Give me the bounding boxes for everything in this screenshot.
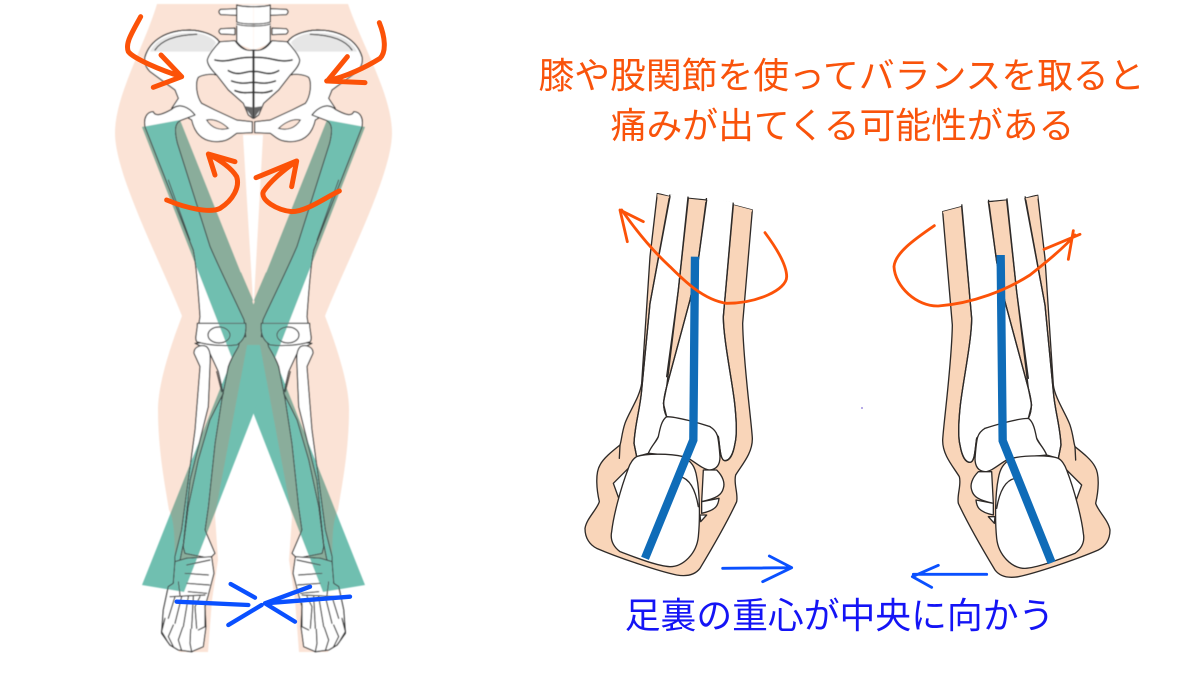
blue centre line [645, 257, 695, 558]
blue centre line [1001, 255, 1052, 563]
foot bones [162, 557, 214, 652]
right ankle diagram [938, 192, 1110, 577]
left half skeleton [145, 5, 253, 652]
orange rotation arrows at the hips and thighs [127, 17, 384, 212]
calcaneus [611, 454, 699, 567]
right ankle overlays: weight line and arrows [894, 226, 1080, 587]
teal crossing bands over background [142, 120, 365, 592]
arrow: right hip inward [327, 23, 384, 83]
olive band area over the body [142, 120, 365, 592]
body silhouette [115, 4, 392, 652]
tibia [663, 197, 736, 461]
teal stripes through the thigh gap [236, 272, 271, 318]
arrow: left thigh rotation [167, 154, 238, 210]
heading: orange explanation: 膝や股関節を使ってバランスを取ると [538, 56, 1145, 96]
hip bone and femur [145, 30, 252, 337]
left ankle diagram [585, 190, 757, 576]
soft tissue silhouette [585, 193, 752, 576]
inner thigh gap [243, 135, 263, 300]
blue arrows: feet converge to centre [177, 584, 350, 625]
talus [648, 417, 720, 470]
fibula [634, 194, 688, 457]
blue arrow to the left [912, 565, 987, 587]
blue arrow to the right [723, 556, 792, 582]
orange rotation arrow [894, 226, 1080, 306]
left ankle overlays: weight line and arrows [620, 210, 792, 582]
tarsal bones [702, 470, 724, 502]
arrow: left hip inward [127, 17, 182, 87]
right half skeleton [254, 5, 362, 652]
tiny dot [861, 407, 863, 409]
orange rotation arrow [620, 210, 787, 303]
lower leg: tibia, fibula and knee [175, 323, 246, 562]
heading: orange explanation [538, 56, 1145, 146]
heading: orange explanation: 痛みが出てくる可能性がある [611, 106, 1074, 146]
caption: blue text: 足裏の重心が中央に向かう [625, 596, 1054, 636]
sacrum and lumbar spine [207, 5, 253, 118]
arrow: right thigh rotation [256, 161, 339, 212]
teal bands showing through the bones [142, 120, 365, 592]
skeleton figure: legs crossing load lines [115, 4, 392, 652]
